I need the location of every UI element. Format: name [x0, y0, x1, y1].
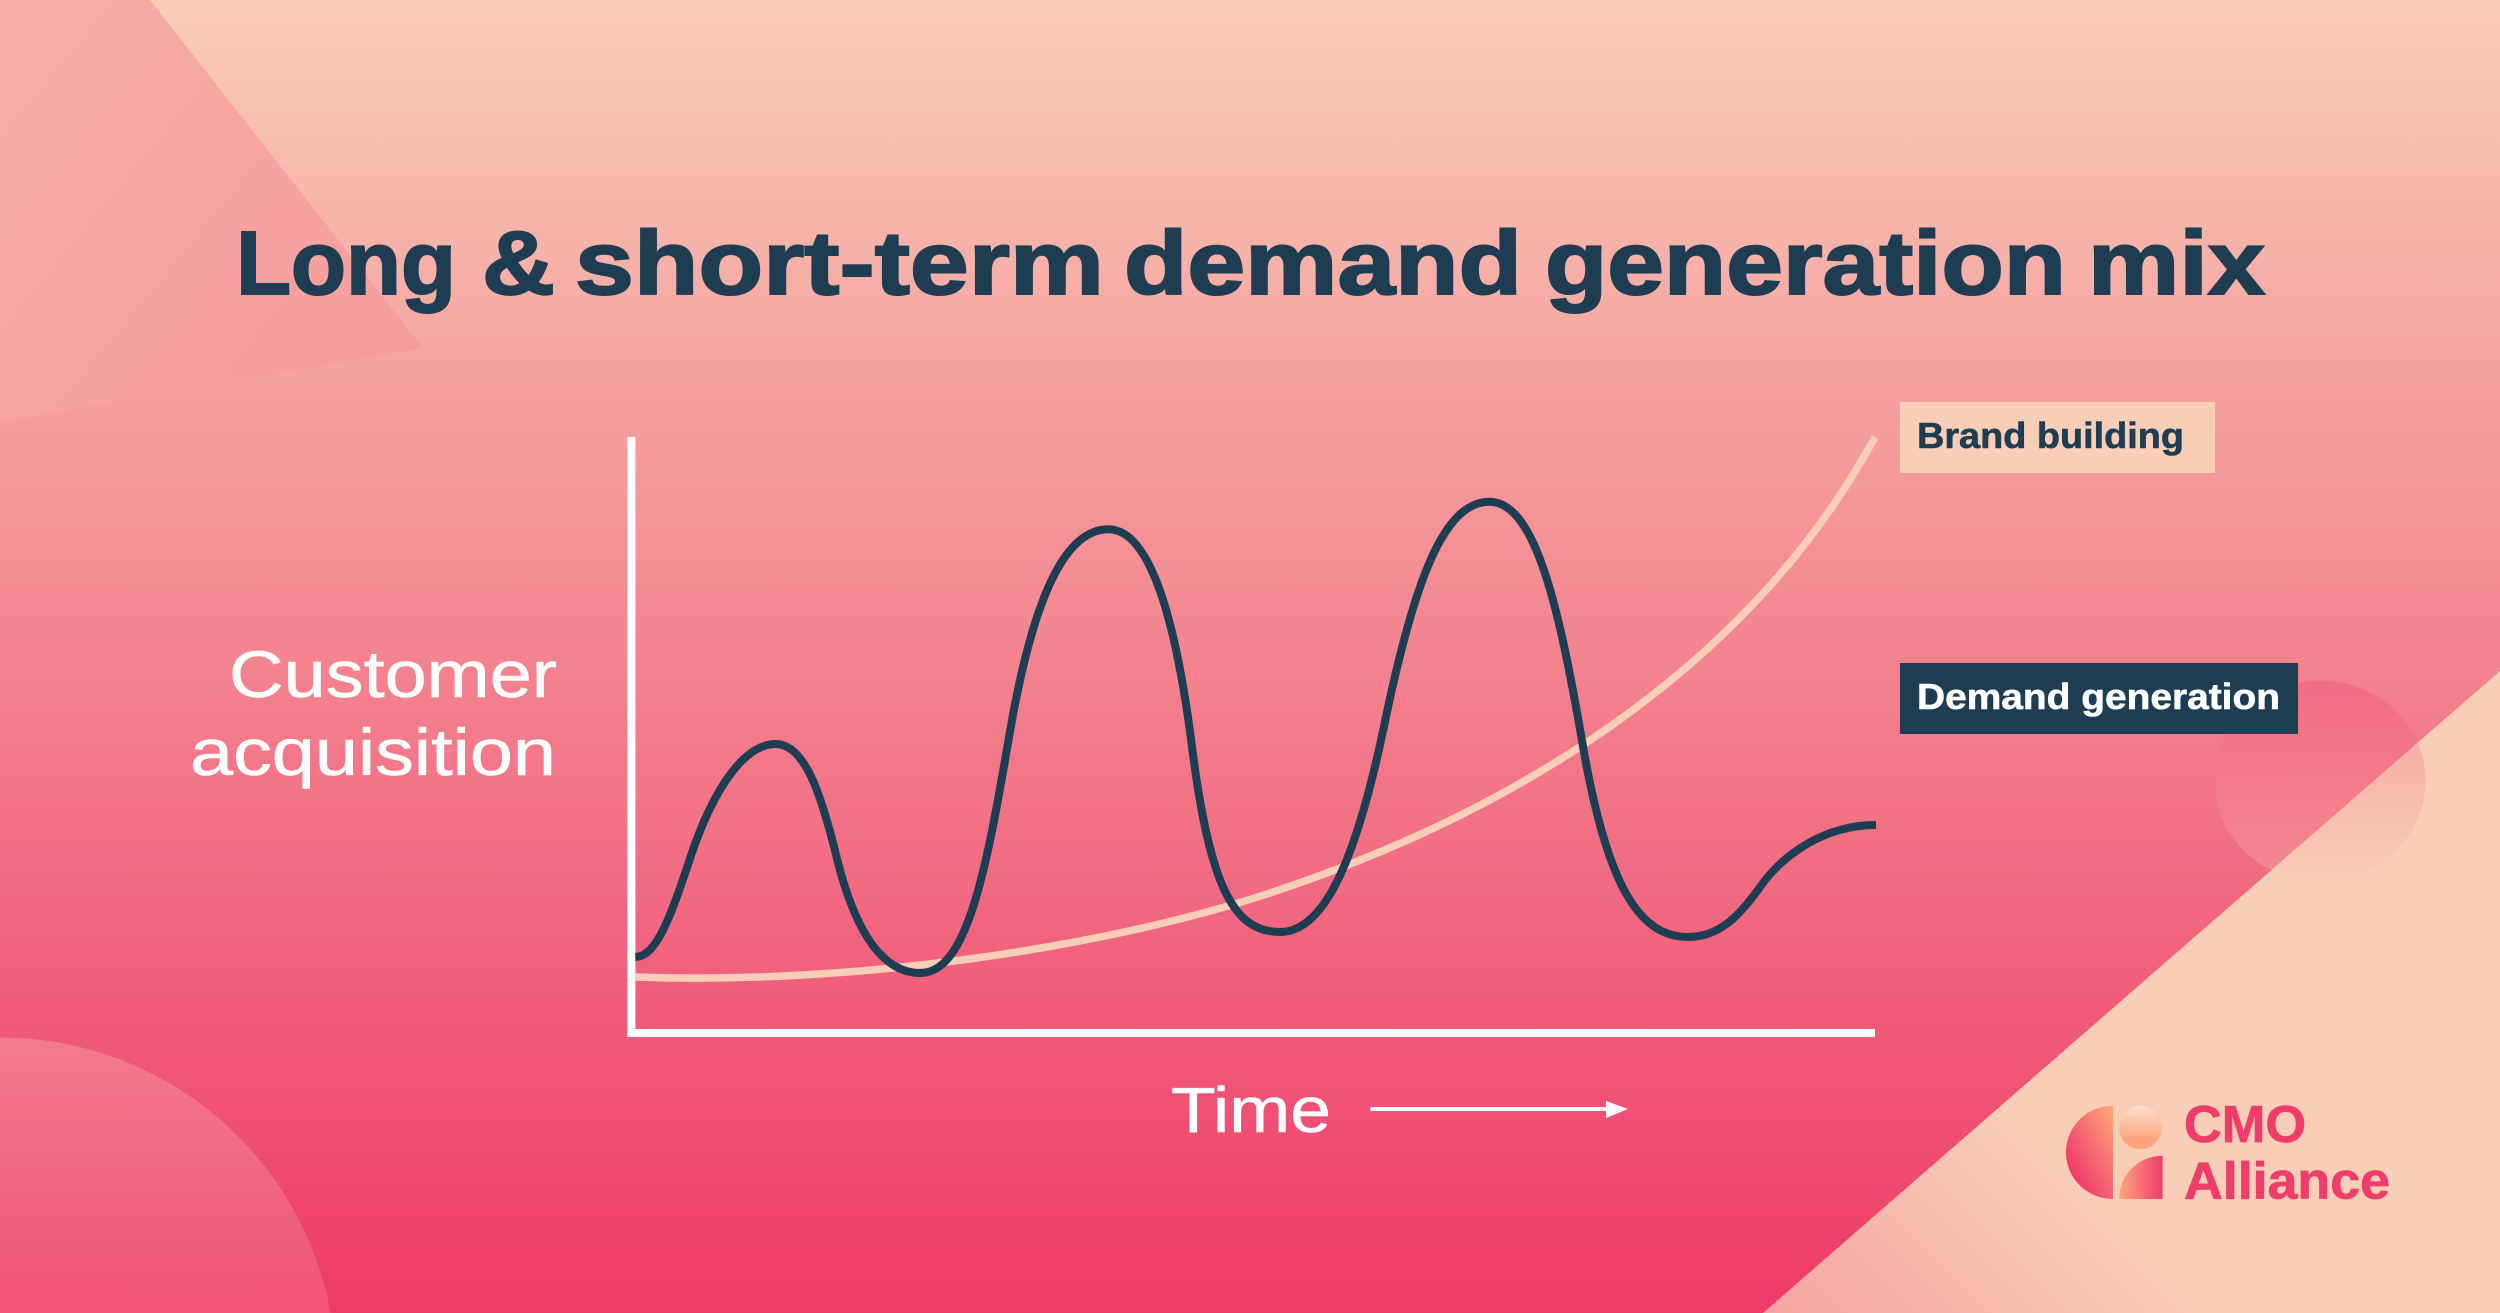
title	[236, 214, 2265, 314]
decorative triangle top left	[0, 0, 423, 422]
y-axis label: Customer acquisition	[190, 637, 557, 789]
legend label: Demand generation	[1900, 663, 2298, 734]
chart axes	[631, 437, 1875, 1033]
brand building curve	[635, 437, 1875, 978]
decorative circle right	[2214, 680, 2426, 882]
legend label: Brand building	[1900, 402, 2215, 473]
title: short-term	[575, 214, 1104, 314]
logo wordmark: Alliance	[2184, 1152, 2390, 1210]
title: mix	[2088, 214, 2265, 314]
logo mark	[2066, 1106, 2163, 1199]
title: demand	[1124, 214, 1522, 314]
legend label: Demand generation: Demand generation	[1917, 676, 2280, 717]
title: generation	[1545, 214, 2066, 314]
chart	[631, 437, 1876, 1033]
decorative peach polygon bottom right	[1763, 671, 2500, 1313]
logo: CMO Alliance	[2066, 1096, 2390, 1210]
arrow: time direction	[1370, 1101, 1628, 1118]
title: Long	[236, 214, 456, 314]
decorative circle bottom left	[0, 1038, 331, 1313]
y-axis label: Customer acquisition: Customer	[229, 637, 557, 711]
demand generation curve	[635, 502, 1876, 973]
logo wordmark: CMO	[2184, 1096, 2306, 1154]
logo wordmark	[2184, 1096, 2390, 1210]
title: &	[482, 214, 555, 314]
legend label: Brand building: Brand building	[1917, 415, 2184, 456]
x-axis label: Time: Time	[1171, 1074, 1331, 1146]
y-axis label: Customer acquisition: acquisition	[190, 715, 556, 789]
